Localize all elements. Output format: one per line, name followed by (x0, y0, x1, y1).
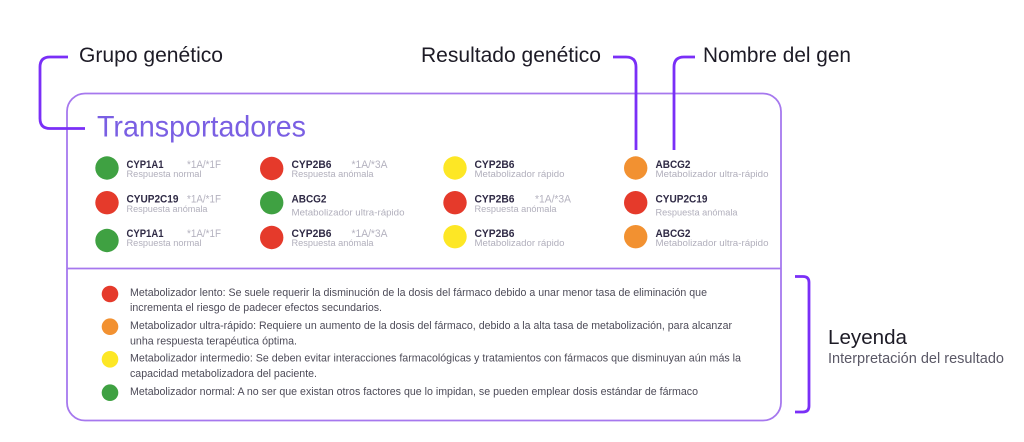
label: Resultado genético: Resultado genético (421, 43, 601, 67)
result: CYP2B6 anómala: CYP2B6 (292, 159, 332, 171)
legend item: intermedio: Metabolizador intermedio: Se deben evitar interacciones farmacológicas y tratamientos con fármacos que disminuyan aún más la (130, 352, 741, 364)
result: CYP1A1 normal: *1A/*1F (187, 228, 221, 240)
result: CYP2B6 anómala (443, 191, 572, 215)
result: CYP2B6 rápido (443, 225, 564, 249)
result: ABCG2 ultra-rápido (624, 225, 768, 249)
result: ABCG2 ultra-rápido: Metabolizador ultra-rápido (656, 169, 768, 180)
panel: Transportadores card (67, 94, 781, 420)
legend item: normal: Metabolizador normal: A no ser que existan otros factores que lo impidan, se pueden emplear dosis estándar de fármaco (130, 386, 698, 398)
result: CYP2B6 anómala: CYP2B6 (292, 228, 332, 240)
result: CYP2B6 anómala: Respuesta anómala (474, 204, 557, 215)
result: CYUP2C19 anómala: CYUP2C19 (126, 194, 178, 206)
result: CYP2B6 anómala: Respuesta anómala (292, 238, 374, 249)
result: ABCG2 ultra-rápido: ABCG2 (292, 194, 326, 206)
label: Leyenda: Interpretación del resultado (828, 351, 1004, 367)
result: CYP1A1 normal: Respuesta normal (126, 238, 202, 249)
result: CYUP2C19 anómala (624, 191, 738, 218)
legend list (102, 286, 741, 401)
legend item: intermedio: capacidad metabolizadora del paciente. (130, 368, 317, 380)
result: CYP2B6 anómala: *1A/*3A (535, 194, 572, 206)
result: CYUP2C19 anómala: Respuesta anómala (126, 204, 208, 215)
result: CYP2B6 rápido: CYP2B6 (474, 228, 514, 240)
result: ABCG2 ultra-rápido: ABCG2 (656, 228, 690, 240)
results column 2 (260, 157, 404, 249)
connector: Resultado genético (613, 57, 636, 150)
result: CYP2B6 anómala: Respuesta anómala (292, 169, 374, 180)
result: CYP1A1 normal (95, 228, 221, 252)
legend item: ultra-rápido (102, 318, 732, 348)
legend item: lento (102, 286, 707, 314)
result: CYP2B6 rápido (443, 156, 564, 180)
results column 1 (95, 156, 221, 252)
results column 4 (624, 156, 768, 249)
result: CYP2B6 anómala: CYP2B6 (474, 194, 514, 206)
label: Leyenda: Leyenda (828, 326, 908, 349)
result: CYUP2C19 anómala (95, 191, 221, 215)
connector: Nombre del gen (674, 57, 695, 150)
result: ABCG2 ultra-rápido (624, 156, 768, 180)
result: CYP2B6 anómala: *1A/*3A (352, 159, 388, 171)
legend item: intermedio (102, 351, 741, 380)
result: CYP1A1 normal (95, 156, 221, 180)
heading: Transportadores: Transportadores (97, 110, 306, 144)
result: CYP2B6 rápido: Metabolizador rápido (474, 169, 564, 180)
result: CYP2B6 anómala (260, 157, 388, 180)
result: CYUP2C19 anómala: *1A/*1F (187, 194, 221, 206)
label: Nombre del gen: Nombre del gen (703, 43, 851, 67)
result: CYP1A1 normal: CYP1A1 (126, 159, 164, 171)
legend item: lento: Metabolizador lento: Se suele requerir la disminución de la dosis del fármaco debido a unar menor tasa de eliminación que (130, 287, 707, 299)
result: ABCG2 ultra-rápido (260, 191, 404, 218)
legend item: lento: incrementa el riesgo de padecer efectos secundarios. (130, 302, 382, 314)
label: Grupo genético: Grupo genético (79, 43, 223, 67)
result: CYP2B6 anómala (260, 226, 388, 249)
legend item: ultra-rápido: Metabolizador ultra-rápido: Requiere un aumento de la dosis del fármaco, debido a la alta tasa de metabolización, para alcanzar (130, 320, 732, 332)
connector: Grupo genético (40, 57, 85, 128)
result: CYP2B6 rápido: CYP2B6 (474, 159, 514, 171)
legend item: ultra-rápido: unha respuesta terapéutica óptima. (130, 336, 297, 348)
connector: Leyenda bracket (795, 276, 809, 412)
label: Leyenda (828, 326, 1004, 367)
result: CYP1A1 normal: Respuesta normal (126, 169, 202, 180)
result: CYP1A1 normal: CYP1A1 (126, 228, 164, 240)
result: CYP2B6 anómala: *1A/*3A (352, 228, 388, 240)
legend item: normal (102, 384, 698, 401)
result: CYP1A1 normal: *1A/*1F (187, 159, 221, 171)
result: CYUP2C19 anómala: Respuesta anómala (656, 208, 738, 218)
result: ABCG2 ultra-rápido: Metabolizador ultra-rápido (656, 238, 768, 249)
result: CYUP2C19 anómala: CYUP2C19 (656, 194, 708, 206)
result: CYP2B6 rápido: Metabolizador rápido (474, 238, 564, 249)
result: ABCG2 ultra-rápido: Metabolizador ultra-rápido (292, 208, 404, 218)
results column 3 (443, 156, 572, 249)
result: ABCG2 ultra-rápido: ABCG2 (656, 159, 690, 171)
